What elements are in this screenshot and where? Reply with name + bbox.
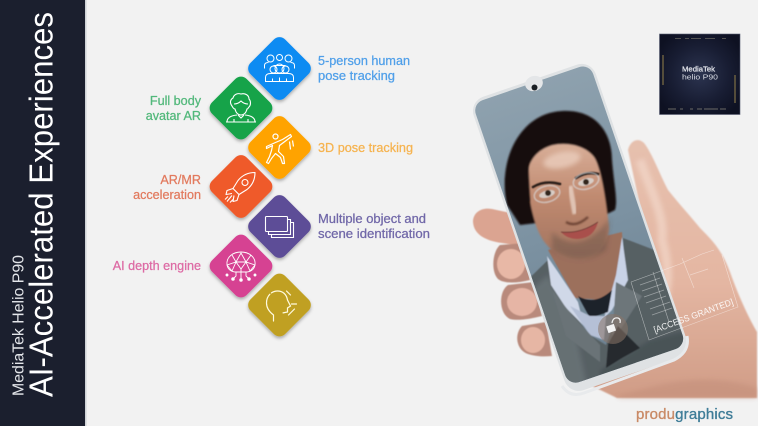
label: 3D pose tracking: 3D pose tracking	[318, 141, 413, 155]
icon: pose figure	[266, 134, 294, 164]
smartphone	[473, 64, 689, 396]
sidebar	[0, 0, 86, 426]
label: 5-person human pose tracking	[318, 54, 410, 83]
icon: avatar	[226, 94, 256, 122]
diamond: face analysis	[245, 270, 314, 340]
diamond: 3D pose tracking	[245, 113, 314, 182]
sidebar title: AI-Accelerated Experiences	[22, 12, 60, 397]
bottom edge highlight of phone	[562, 336, 687, 394]
label: AR/MR acceleration	[133, 173, 201, 202]
access granted hologram	[631, 250, 738, 340]
label: multiple object and scene identification: Multiple object and	[318, 212, 426, 226]
icon: neural brain	[226, 252, 256, 281]
nose	[570, 186, 575, 214]
label: AI depth engine: AI depth engine	[113, 259, 201, 273]
unlock indicator	[598, 314, 628, 344]
diamond: 5-person human pose tracking	[245, 34, 314, 103]
diamond: AI depth engine	[206, 231, 276, 301]
label: full body avatar AR	[146, 94, 202, 123]
label: AR/MR acceleration: AR/MR	[160, 173, 201, 187]
mouth	[561, 222, 598, 239]
label: multiple object and scene identification: scene identification	[318, 227, 430, 241]
sweater zip	[606, 326, 640, 368]
diamond: AR/MR acceleration	[206, 152, 276, 221]
label: 5-person human pose tracking: 5-person human	[318, 54, 410, 68]
hand behind phone	[473, 140, 757, 398]
icon: group of people	[264, 54, 294, 82]
portrait on phone screen	[503, 110, 684, 383]
label: AR/MR acceleration: acceleration	[133, 188, 201, 202]
diamond: full body avatar AR	[206, 73, 276, 143]
fingers	[473, 209, 552, 356]
sidebar subtitle: MediaTek Helio P90	[10, 255, 28, 396]
chip text: MediaTek	[682, 64, 715, 74]
undershirt	[578, 290, 612, 318]
label: 5-person human pose tracking: pose tracking	[318, 69, 395, 83]
face	[527, 144, 609, 261]
phone notch and camera	[523, 73, 545, 94]
neck	[548, 232, 624, 300]
label: multiple object and scene identification	[318, 212, 430, 241]
chip image: MediaTek Helio P90	[660, 34, 740, 114]
beard shadow	[552, 218, 610, 259]
shirt collar	[547, 256, 584, 326]
diamond: multiple object and scene identification	[245, 192, 314, 261]
sweater	[531, 238, 682, 380]
chip image: MediaTek Helio P90: helio P90	[682, 72, 718, 82]
icon: stacked frames	[266, 216, 294, 238]
sweater collar	[613, 282, 642, 334]
label: full body avatar AR: avatar AR	[146, 109, 201, 123]
hair side left	[505, 163, 532, 204]
label: full body avatar AR: Full body	[150, 94, 202, 108]
eyes and brows	[532, 170, 601, 205]
hair	[505, 111, 616, 225]
icon: head profile	[266, 291, 296, 321]
access granted text: [ACCESS GRANTED]	[652, 297, 735, 335]
logo: produgraphics: produgraphics	[636, 406, 733, 423]
icon: rocket	[225, 172, 255, 202]
